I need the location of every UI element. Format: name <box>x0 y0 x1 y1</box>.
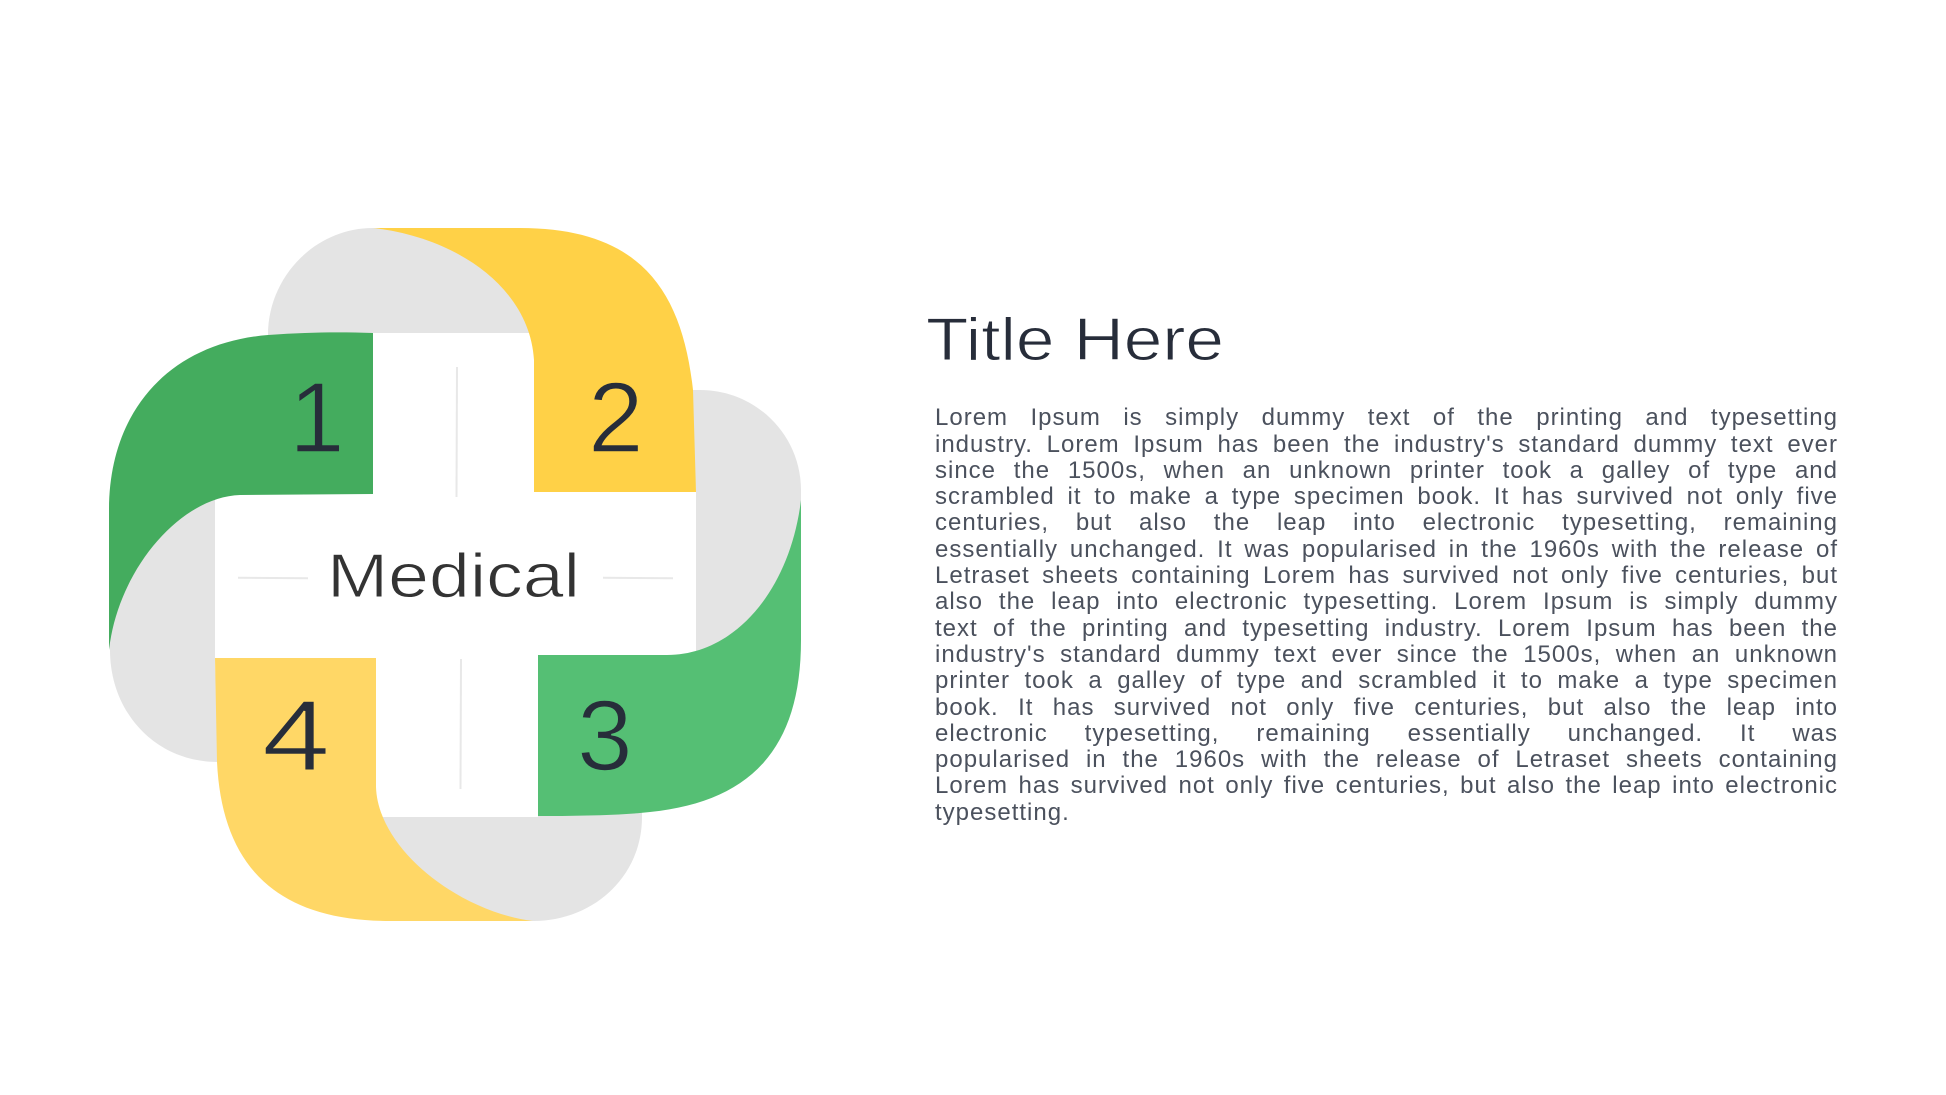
gray band: left <box>109 490 218 762</box>
body paragraph: typesetting. <box>935 799 1070 826</box>
number 4: 4 <box>262 680 330 792</box>
body paragraph: popularised in the 1960s with the release of Letraset sheets containing <box>935 746 1838 773</box>
body paragraph: industry. Lorem Ipsum has been the industry's standard dummy text ever <box>935 431 1838 458</box>
body paragraph: since the 1500s, when an unknown printer took a galley of type and <box>935 457 1838 484</box>
gray band: bottom <box>370 808 642 921</box>
body paragraph: electronic typesetting, remaining essentially unchanged. It was <box>935 720 1838 747</box>
body paragraph <box>935 404 1838 826</box>
body paragraph: printer took a galley of type and scrambled it to make a type specimen <box>935 667 1838 694</box>
body paragraph: Letraset sheets containing Lorem has survived not only five centuries, but <box>935 562 1838 589</box>
body paragraph: essentially unchanged. It was popularised in the 1960s with the release of <box>935 536 1838 563</box>
body paragraph: centuries, but also the leap into electronic typesetting, remaining <box>935 509 1838 536</box>
number 3: 3 <box>577 680 633 792</box>
gray band: right <box>690 390 801 660</box>
yellow band 2 <box>373 228 696 492</box>
green band 3 <box>538 500 801 816</box>
body paragraph: scrambled it to make a type specimen book. It has survived not only five <box>935 483 1838 510</box>
body paragraph: also the leap into electronic typesetting. Lorem Ipsum is simply dummy <box>935 588 1838 615</box>
center label: Medical: Medical <box>327 542 580 611</box>
body paragraph: Lorem Ipsum is simply dummy text of the printing and typesetting <box>935 404 1838 431</box>
green band 1 <box>109 332 373 650</box>
body paragraph: text of the printing and typesetting industry. Lorem Ipsum has been the <box>935 615 1838 642</box>
body paragraph: book. It has survived not only five centuries, but also the leap into <box>935 694 1838 721</box>
number 2: 2 <box>588 362 644 474</box>
number 1: 1 <box>289 362 345 474</box>
gray band: top <box>268 228 534 340</box>
body paragraph: industry's standard dummy text ever since the 1500s, when an unknown <box>935 641 1838 668</box>
body paragraph: Lorem has survived not only five centuries, but also the leap into electronic <box>935 772 1838 799</box>
title: Title Here <box>926 306 1224 373</box>
yellow band 4 <box>215 658 533 921</box>
